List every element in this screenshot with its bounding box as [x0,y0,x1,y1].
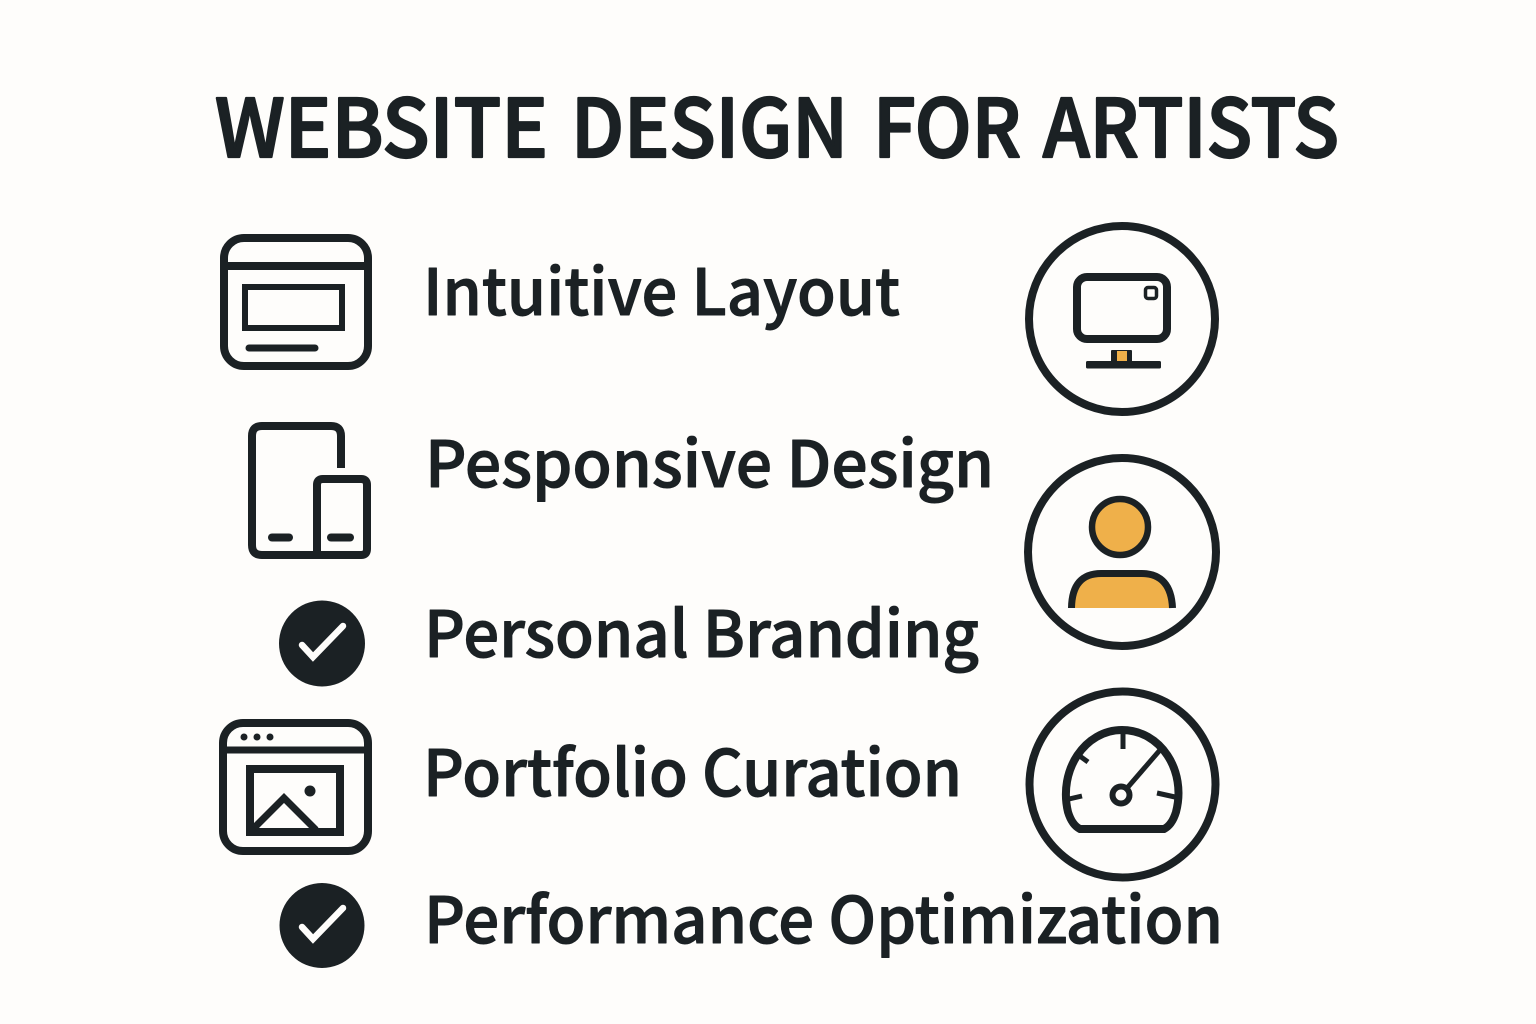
title: WEBSITE [215,65,548,181]
label: Portfolio Curation: Portfolio Curation [423,723,962,815]
label: Personal Branding: Personal Branding [424,584,979,676]
title: FOR [873,65,1021,181]
icon: monitor in circle [1029,226,1215,412]
title: ARTISTS [1043,65,1339,181]
title: DESIGN [571,65,848,181]
label: Performance Optimization: Performance Optimization [424,870,1223,962]
icon: layout window [224,238,368,366]
label: Pesponsive Design: Pesponsive Design [425,414,994,506]
icon: speedometer in circle [1030,692,1216,878]
icon: portfolio window [223,723,368,851]
icon: person in circle [1028,458,1216,646]
title [215,65,1339,181]
label: Intuitive Layout: Intuitive Layout [423,242,900,334]
icon: tablet and phone [252,426,367,555]
icon: check badge one [279,600,365,686]
icon: check badge two [280,883,364,968]
